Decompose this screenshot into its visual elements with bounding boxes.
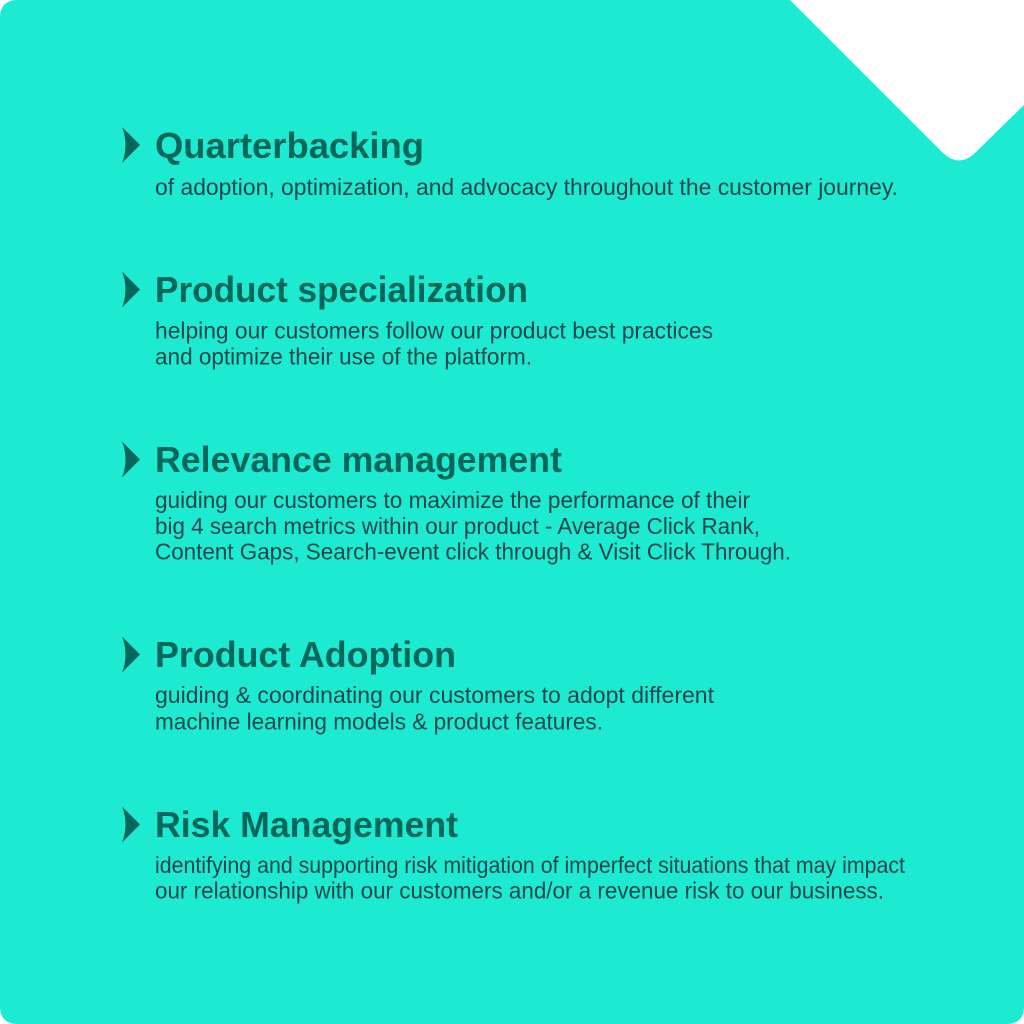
- text: Product Adoption description: [155, 682, 715, 734]
- icon: chevron: [122, 442, 140, 478]
- text: Quarterbacking description: of adoption, optimization, and advocacy throughout the customer journey.: [155, 174, 898, 200]
- heading: Risk Management: Risk Management: [155, 804, 458, 845]
- text: Relevance management description: [155, 487, 791, 564]
- text: Risk Management description: identifying and supporting risk mitigation of imperfect situations that may impact: [155, 852, 906, 878]
- heading: Quarterbacking: Quarterbacking: [155, 125, 424, 166]
- item: Product specialization: [122, 269, 713, 370]
- icon: chevron: [122, 127, 140, 163]
- icon: chevron: [122, 806, 140, 842]
- heading: Product Adoption: Product Adoption: [155, 634, 456, 675]
- text: Product specialization description: [155, 318, 713, 370]
- text: Product specialization description: and optimize their use of the platform.: [155, 344, 532, 370]
- icon: chevron: [122, 272, 140, 308]
- text: Product Adoption description: machine learning models & product features.: [155, 708, 603, 734]
- item: Risk Management: [122, 804, 906, 904]
- text: Risk Management description: our relationship with our customers and/or a revenue risk to our business.: [155, 878, 884, 904]
- text: Relevance management description: big 4 search metrics within our product - Average Click Rank,: [155, 513, 760, 539]
- heading: Relevance management: Relevance management: [155, 439, 562, 480]
- item: Quarterbacking: [122, 125, 898, 200]
- text: Relevance management description: Content Gaps, Search-event click through & Visit Click Through.: [155, 538, 791, 564]
- item: Relevance management: [122, 439, 791, 564]
- text: Product specialization description: helping our customers follow our product best practices: [155, 318, 713, 344]
- text: Risk Management description: [155, 852, 906, 904]
- heading: Product specialization: Product specialization: [155, 269, 528, 310]
- icon: chevron: [122, 636, 140, 672]
- item: Product Adoption: [122, 634, 715, 734]
- text: Relevance management description: guiding our customers to maximize the performance of their: [155, 487, 750, 513]
- text: Product Adoption description: guiding & coordinating our customers to adopt different: [155, 682, 715, 708]
